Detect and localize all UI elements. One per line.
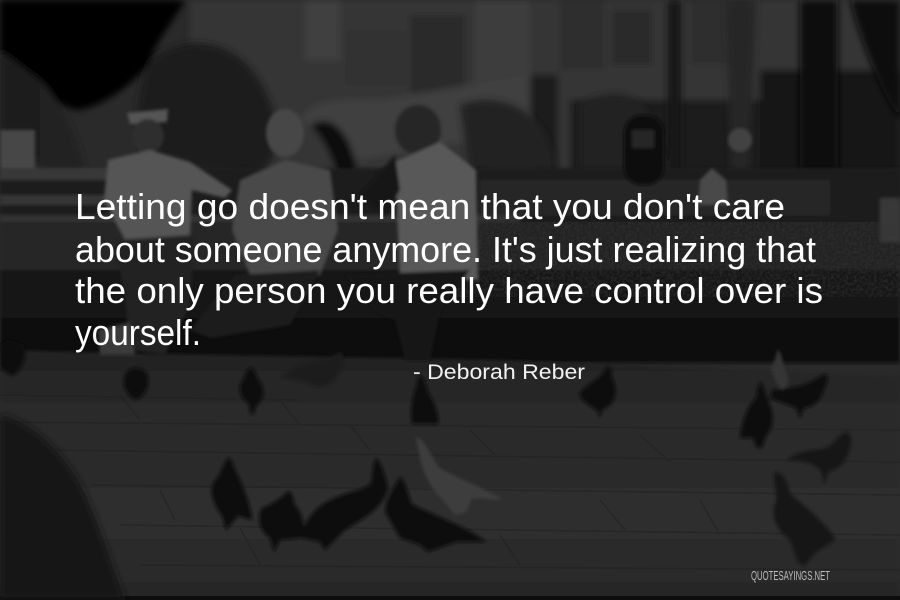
dark tree trunks and canopy (0, 0, 900, 210)
pigeon (385, 477, 486, 552)
pigeon (772, 350, 789, 390)
pigeon (259, 491, 304, 552)
street sign and clock (624, 115, 752, 205)
man 3 (395, 105, 441, 155)
quote text: about someone anymore. It's just realizing that (75, 229, 816, 270)
pigeon (240, 368, 264, 414)
man 1 (127, 109, 168, 124)
pigeon (740, 382, 773, 448)
quote text: the only person you really have control over is (75, 270, 823, 311)
pigeon (580, 366, 616, 418)
buildings (190, 0, 900, 200)
quote text: yourself. (75, 312, 201, 353)
pigeon (212, 458, 252, 530)
pigeon (124, 368, 148, 400)
watermark: QUOTESAYINGS.NET (751, 568, 830, 583)
pigeon (411, 376, 439, 424)
ground pavement (0, 350, 900, 600)
quote text: Letting go doesn't mean that you don't care (75, 186, 785, 227)
pigeon (302, 458, 388, 550)
pigeon (280, 352, 343, 386)
quote text (75, 186, 823, 353)
bench and hedge band (0, 130, 900, 363)
three men on bench (98, 105, 478, 360)
pigeon (770, 374, 828, 418)
pigeon (0, 340, 25, 376)
bush lower left (0, 415, 125, 600)
pigeon light (416, 437, 503, 515)
pigeon (787, 432, 851, 484)
man 2 (266, 109, 304, 157)
pigeons (0, 340, 851, 566)
pigeon (774, 472, 835, 566)
bottom edge strip (0, 596, 900, 600)
attribution: - Deborah Reber (413, 361, 585, 384)
hedge texture (430, 222, 900, 297)
